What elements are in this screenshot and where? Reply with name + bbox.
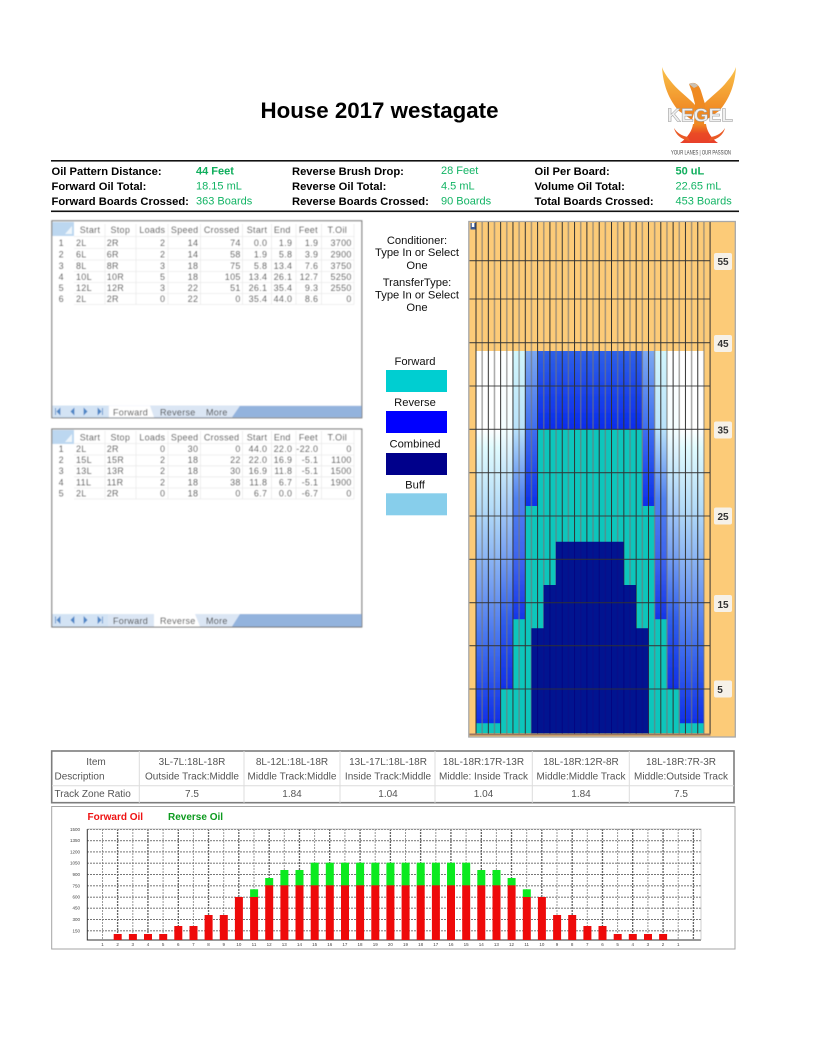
table rows: 0	[346, 294, 352, 304]
chart: lane oil pattern graph	[469, 222, 735, 737]
table rows: 6L	[76, 250, 87, 260]
row: track zone ratio: Track Zone Ratio	[54, 789, 131, 800]
table rows: 3.9	[305, 250, 318, 260]
table rows: -5.1	[302, 477, 318, 487]
table rows: 5	[59, 488, 64, 498]
x axis labels: 10	[539, 942, 545, 947]
x axis labels: 14	[479, 942, 484, 947]
y axis labels: 1050	[70, 861, 80, 866]
x axis labels: 17	[342, 942, 348, 947]
table rows: 35.4	[249, 294, 267, 304]
distance labels: 15	[717, 600, 729, 611]
x axis labels: 18	[358, 942, 363, 947]
table rows: 1	[59, 444, 64, 454]
table rows: 6.7	[279, 477, 292, 487]
y axis labels: 1500	[70, 827, 80, 832]
column 3 stats: 22.65 mL	[676, 180, 721, 192]
table header: Loads	[139, 432, 166, 442]
table rows: 7.6	[305, 261, 318, 271]
table header: Speed	[171, 432, 198, 442]
table rows	[59, 238, 352, 304]
table rows: 18	[188, 466, 198, 476]
panel: forward steps table	[52, 221, 362, 418]
x axis labels	[101, 942, 680, 947]
x axis labels: 6	[177, 942, 180, 947]
x axis labels: 16	[327, 942, 333, 947]
table rows: 105	[225, 272, 241, 282]
x axis labels: 20	[388, 942, 393, 947]
column 2 stats: Reverse Brush Drop:	[292, 166, 404, 178]
title: House 2017 westagate	[261, 98, 498, 123]
table rows: -5.1	[302, 466, 318, 476]
table rows: 44.0	[249, 444, 267, 454]
x axis labels: 19	[373, 942, 378, 947]
conditioner and transfer notes: Type In or Select	[375, 247, 460, 259]
legend: reverse	[386, 397, 447, 433]
x axis labels: 8	[207, 942, 210, 947]
table rows: 12.7	[300, 272, 318, 282]
combined oil area	[531, 542, 648, 733]
table rows: 3700	[330, 238, 352, 248]
y axis labels: 750	[72, 883, 80, 888]
table rows: 2	[160, 455, 165, 465]
table rows: 74	[230, 238, 241, 248]
column 1 stats: Forward Oil Total:	[52, 181, 146, 193]
x axis labels: 1	[677, 942, 680, 947]
table rows: 16.9	[274, 455, 292, 465]
table rows: 3750	[330, 261, 352, 271]
table rows: 2550	[330, 283, 352, 293]
table rows: 6	[59, 294, 64, 304]
x axis labels: 15	[312, 942, 318, 947]
table header: End	[274, 225, 291, 235]
y axis labels: 450	[72, 906, 80, 911]
table header	[80, 432, 347, 442]
column 3 stats: 50 uL	[676, 166, 705, 178]
conditioner and transfer notes: Conditioner:	[387, 235, 447, 247]
table rows: 6.7	[254, 488, 267, 498]
table rows: 2R	[107, 238, 119, 248]
oil zone shading	[476, 351, 704, 733]
table rows: 14	[188, 238, 198, 248]
x axis labels: 2	[116, 942, 119, 947]
sheet tabs: More	[206, 616, 228, 626]
table rows: 2L	[76, 238, 87, 248]
table rows: 3	[59, 261, 64, 271]
table rows: 9.3	[305, 283, 318, 293]
table rows: 44.0	[274, 294, 292, 304]
column 1 stats: Forward Boards Crossed:	[52, 196, 189, 208]
table rows: 2	[160, 250, 165, 260]
table rows: 2L	[76, 488, 87, 498]
table rows: 15R	[107, 455, 124, 465]
forward oil bars	[114, 885, 667, 940]
table rows: 8R	[107, 261, 119, 271]
table rows: 10R	[107, 272, 124, 282]
icon: Kegel phoenix logo: YOUR LANES | OUR PASSION	[671, 150, 731, 156]
row: item: 8L-12L:18L-18R	[256, 757, 328, 768]
row: track zone ratio: 7.5	[674, 789, 688, 800]
legend: combined	[386, 438, 447, 475]
table rows: 0	[235, 444, 241, 454]
x axis labels: 1	[101, 942, 104, 947]
column 2 stats: 4.5 mL	[441, 180, 475, 192]
table rows: 22	[188, 283, 198, 293]
column 3 stats: Volume Oil Total:	[534, 181, 625, 193]
x axis labels: 5	[162, 942, 165, 947]
table header: Start	[80, 225, 100, 235]
table rows: 26.1	[274, 272, 292, 282]
row: track zone ratio: 1.04	[474, 789, 494, 800]
icon: Kegel phoenix logo	[662, 67, 736, 156]
table rows: 13R	[107, 466, 124, 476]
x axis labels: 11	[524, 942, 530, 947]
table rows: 18	[188, 488, 198, 498]
table rows: 58	[230, 250, 241, 260]
conditioner and transfer notes	[375, 235, 460, 314]
table rows: 15L	[76, 455, 92, 465]
table: track zone ratio	[52, 751, 734, 803]
x axis labels: 16	[448, 942, 454, 947]
x axis labels: 17	[433, 942, 439, 947]
y axis labels: 1200	[70, 849, 80, 854]
column 1 stats: 363 Boards	[196, 196, 253, 208]
chart legend	[88, 812, 223, 823]
table rows: 11R	[107, 477, 124, 487]
table rows: 1500	[330, 466, 352, 476]
y axis labels: 1350	[70, 838, 80, 843]
legend	[386, 356, 447, 515]
x axis labels: 7	[192, 942, 195, 947]
chart: oil per board bar chart	[52, 806, 735, 949]
panel: reverse steps table	[52, 429, 362, 627]
table rows: 1100	[331, 455, 352, 465]
chart legend: Forward Oil	[88, 812, 143, 823]
row: track zone ratio: 7.5	[185, 789, 199, 800]
table rows: -6.7	[302, 488, 318, 498]
table rows: 5	[160, 272, 165, 282]
x axis labels: 12	[509, 942, 515, 947]
table rows: 2	[160, 466, 165, 476]
table rows: 0	[160, 488, 165, 498]
table rows: 5.8	[254, 261, 267, 271]
table rows: 75	[230, 261, 241, 271]
table header: T.Oil	[328, 432, 347, 442]
sheet tabs	[52, 406, 362, 418]
table header	[80, 225, 347, 235]
table rows: 0	[346, 444, 352, 454]
column 2 stats: Reverse Boards Crossed:	[292, 196, 429, 208]
y axis labels: 600	[72, 895, 80, 900]
row: item: Item	[86, 757, 106, 768]
conditioner and transfer notes: Type In or Select	[375, 290, 460, 302]
distance labels: 45	[717, 339, 729, 350]
chart legend: Reverse Oil	[168, 812, 223, 823]
row: description: Middle:Outside Track	[634, 772, 729, 782]
row: description	[54, 772, 729, 782]
sheet tabs	[52, 614, 362, 626]
table header: Stop	[110, 225, 130, 235]
table rows: 2R	[107, 488, 119, 498]
table rows: 11L	[76, 477, 91, 487]
x axis labels: 12	[267, 942, 272, 947]
table rows: 0	[160, 294, 165, 304]
x axis labels: 13	[494, 942, 499, 947]
y axis labels: 150	[72, 928, 80, 933]
y axis labels: 300	[72, 917, 80, 922]
row: item	[86, 757, 716, 768]
x axis labels: 9	[556, 942, 559, 947]
x axis labels: 2	[662, 942, 665, 947]
y axis labels	[70, 827, 80, 933]
x axis labels: 6	[601, 942, 604, 947]
legend: buff: Buff	[405, 480, 426, 492]
legend: forward: Forward	[394, 356, 436, 368]
sheet tabs: Reverse	[160, 408, 196, 418]
x axis labels: 19	[403, 942, 408, 947]
column 3 stats: 453 Boards	[676, 196, 732, 208]
sheet tabs: Reverse	[160, 616, 196, 626]
x axis labels: 7	[586, 942, 589, 947]
y axis labels: 900	[72, 872, 80, 877]
table rows: 2L	[76, 444, 87, 454]
table rows: 26.1	[249, 283, 267, 293]
x axis labels: 13	[282, 942, 287, 947]
table rows: 2R	[107, 444, 119, 454]
table header: T.Oil	[328, 225, 347, 235]
distance labels	[714, 253, 732, 698]
table rows: 14	[188, 250, 198, 260]
row: track zone ratio: 1.84	[571, 789, 591, 800]
table rows: 0.0	[279, 488, 292, 498]
row: item: 3L-7L:18L-18R	[159, 757, 225, 768]
table rows: 0	[235, 488, 241, 498]
row: track zone ratio: 1.84	[282, 789, 302, 800]
table header: Crossed	[204, 432, 240, 442]
conditioner and transfer notes: One	[406, 260, 428, 272]
x axis labels: 3	[132, 942, 135, 947]
table rows: 1900	[330, 477, 352, 487]
x axis labels: 11	[252, 942, 257, 947]
table header: Start	[80, 432, 100, 442]
table rows: 22	[230, 455, 241, 465]
legend: combined: Combined	[390, 438, 440, 450]
table rows: 30	[188, 444, 198, 454]
table rows: 51	[230, 283, 241, 293]
row: item: 18L-18R:17R-13R	[443, 757, 524, 768]
x axis labels: 3	[647, 942, 650, 947]
table rows: 0	[346, 488, 352, 498]
table rows: 3	[160, 261, 165, 271]
distance labels: 35	[717, 426, 729, 436]
column 3 stats: Total Boards Crossed:	[534, 196, 654, 208]
conditioner and transfer notes: TransferType:	[383, 277, 451, 289]
table rows: 1.9	[254, 250, 267, 260]
forward oil area	[476, 429, 704, 733]
table rows: 22	[188, 294, 198, 304]
table rows: 3	[59, 466, 64, 476]
sheet tabs: More	[206, 408, 228, 418]
x axis labels: 9	[222, 942, 225, 947]
column 2 stats: 90 Boards	[441, 196, 492, 208]
column 2 stats: 28 Feet	[441, 165, 478, 177]
column 1 stats	[52, 166, 253, 208]
table rows: 1.9	[305, 238, 318, 248]
table rows: 4	[59, 477, 64, 487]
table rows: 0.0	[254, 238, 267, 248]
table rows: 22.0	[274, 444, 292, 454]
reverse oil bars	[250, 863, 531, 897]
column 1 stats: 44 Feet	[196, 166, 234, 178]
table rows: 35.4	[274, 283, 292, 293]
table rows: 2R	[107, 294, 119, 304]
legend: reverse: Reverse	[394, 397, 436, 409]
table rows: 0	[160, 444, 165, 454]
table rows: 0	[235, 294, 241, 304]
table header: Feet	[299, 225, 318, 235]
table rows: 1	[59, 238, 64, 248]
x axis labels: 8	[571, 942, 574, 947]
row: item: 18L-18R:12R-8R	[543, 757, 619, 768]
column 2 stats	[292, 165, 492, 208]
table rows: 2	[160, 238, 165, 248]
row: description: Middle:Middle Track	[537, 772, 626, 782]
column 3 stats	[534, 166, 732, 208]
x axis labels: 18	[418, 942, 424, 947]
x axis labels: 4	[631, 942, 634, 947]
icon: Kegel phoenix logo: KEGEL	[667, 106, 733, 126]
x axis labels: 15	[464, 942, 469, 947]
distance labels: 25	[717, 512, 729, 523]
table header: Speed	[171, 225, 198, 235]
table rows: 22.0	[249, 455, 267, 465]
row: item: 18L-18R:7R-3R	[646, 757, 716, 768]
row: description: Middle: Inside Track	[439, 772, 529, 782]
table rows: 2	[59, 250, 64, 260]
table rows: 5.8	[279, 250, 292, 260]
sheet tabs: Forward	[113, 616, 148, 626]
table header: Crossed	[204, 225, 240, 235]
conditioner and transfer notes: One	[406, 302, 428, 314]
table rows: 4	[59, 272, 64, 282]
table rows: -22.0	[296, 444, 318, 454]
x axis labels: 5	[616, 942, 619, 947]
table rows: 11.8	[274, 466, 292, 476]
legend: forward	[386, 356, 447, 392]
table rows: 30	[230, 466, 241, 476]
row: description: Description	[54, 772, 105, 782]
table rows: 13.4	[274, 261, 292, 271]
column 1 stats: 18.15 mL	[196, 180, 242, 192]
table rows: 11.8	[249, 477, 267, 487]
table rows: 18	[188, 261, 198, 271]
row: track zone ratio	[54, 789, 688, 800]
x axis labels: 4	[147, 942, 150, 947]
x axis labels: 10	[236, 942, 242, 947]
table rows: 18	[188, 272, 198, 282]
table header: Start	[247, 225, 267, 235]
table rows: 2L	[76, 294, 87, 304]
table rows: 8.6	[305, 294, 318, 304]
row: description: Middle Track:Middle	[248, 772, 337, 782]
column 3 stats: Oil Per Board:	[534, 166, 610, 178]
row: description: Outside Track:Middle	[145, 772, 239, 782]
column 2 stats: Reverse Oil Total:	[292, 181, 386, 193]
table rows: 6R	[107, 250, 119, 260]
table rows: 13.4	[249, 272, 267, 282]
row: description: Inside Track:Middle	[345, 772, 432, 782]
table rows: 38	[230, 477, 241, 487]
table header: Start	[247, 432, 267, 442]
table rows: 2	[59, 455, 64, 465]
table header: Loads	[139, 225, 166, 235]
table rows: 12L	[76, 283, 92, 293]
table rows: 5250	[330, 272, 352, 282]
x axis labels: 14	[297, 942, 302, 947]
table header: Stop	[110, 432, 130, 442]
table rows: 1.9	[279, 238, 292, 248]
table rows: 18	[188, 455, 198, 465]
table header: Feet	[299, 432, 318, 442]
row: track zone ratio: 1.04	[378, 789, 398, 800]
table rows: 16.9	[249, 466, 267, 476]
legend: buff	[386, 480, 447, 515]
table rows: 8L	[76, 261, 87, 271]
row: item: 13L-17L:18L-18R	[349, 757, 427, 768]
table rows	[59, 444, 352, 498]
table rows: 18	[188, 477, 198, 487]
table rows: 3	[160, 283, 165, 293]
table rows: 12R	[107, 283, 124, 293]
table rows: 10L	[76, 272, 92, 282]
table rows: 13L	[76, 466, 92, 476]
table rows: 2900	[330, 250, 352, 260]
pattern summary block	[52, 165, 732, 208]
table rows: 2	[160, 477, 165, 487]
distance labels: 55	[717, 257, 729, 268]
icon: graph corner marker	[470, 223, 476, 230]
table rows: -5.1	[302, 455, 318, 465]
table rows: 5	[59, 283, 64, 293]
distance labels: 5	[717, 685, 723, 696]
sheet tabs: Forward	[113, 408, 148, 418]
column 1 stats: Oil Pattern Distance:	[52, 166, 162, 178]
table header: End	[274, 432, 291, 442]
